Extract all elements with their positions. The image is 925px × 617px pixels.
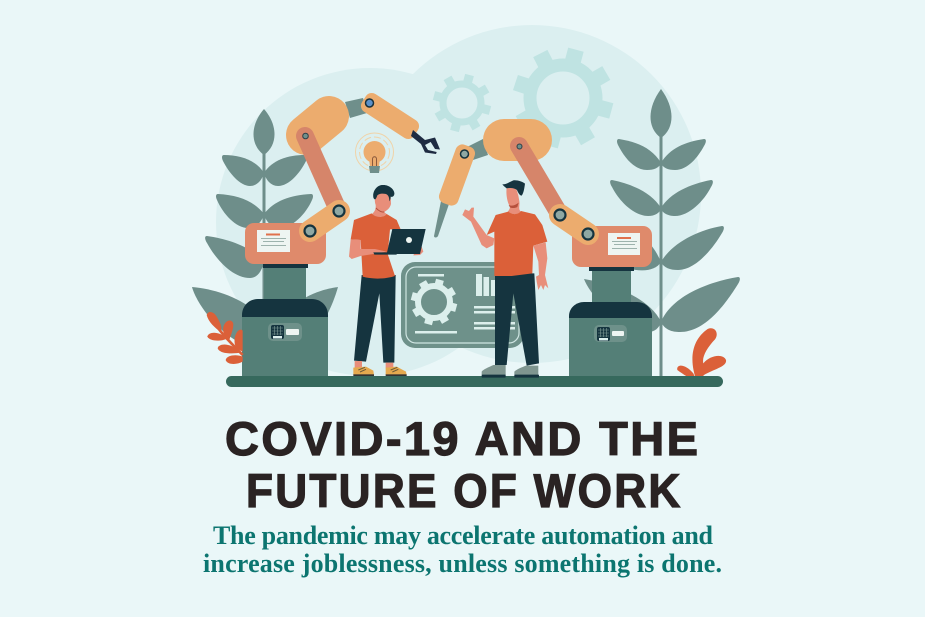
- left robot arm: [303, 90, 440, 210]
- right robot base: [554, 210, 652, 376]
- icon: large gear: [513, 48, 613, 148]
- title: [225, 412, 698, 517]
- robot label: [608, 233, 640, 255]
- robot lower arm: [304, 206, 344, 236]
- lowered arm and hand: [533, 242, 548, 290]
- screen bar chart: [476, 274, 495, 296]
- left man with laptop: [349, 185, 426, 376]
- subtitle: increase joblessness, unless something is done.: [203, 549, 722, 578]
- legs and shoes: [353, 275, 407, 376]
- right red plant: [677, 328, 726, 383]
- icon: small gear: [433, 74, 491, 132]
- screen gear icon: [411, 279, 457, 325]
- left plant: [192, 109, 338, 345]
- right man: [462, 180, 548, 378]
- drill tool: [434, 201, 449, 238]
- ground bar: [226, 376, 723, 387]
- gripper claw: [411, 130, 440, 154]
- keypad panel: [594, 325, 627, 342]
- legs and shoes: [482, 273, 539, 378]
- screen text lines: [474, 306, 515, 330]
- left red plant: [207, 312, 243, 364]
- title: COVID-19 AND THE: [225, 412, 698, 465]
- mouth: [509, 203, 519, 208]
- robot lower arm: [554, 210, 594, 240]
- mouth: [376, 208, 384, 212]
- subtitle: The pandemic may accelerate automation and: [213, 521, 714, 550]
- raised arm and hand: [462, 208, 494, 248]
- right robot arm: [434, 119, 560, 238]
- control screen panel: [401, 262, 524, 348]
- left robot base: [242, 206, 344, 376]
- shirt: [487, 211, 547, 276]
- upper body: [349, 185, 426, 279]
- hair: [373, 185, 394, 201]
- title: FUTURE OF WORK: [246, 465, 680, 517]
- background blob: [216, 25, 701, 376]
- robot label: [257, 230, 290, 252]
- upper body: [462, 180, 548, 290]
- arm: [349, 239, 387, 259]
- subtitle: [203, 521, 722, 578]
- neck and face: [372, 192, 391, 217]
- hand: [413, 247, 423, 255]
- shirt: [351, 213, 401, 279]
- neck and face: [506, 187, 521, 214]
- icon: light bulb: [356, 133, 394, 173]
- right plant: [584, 89, 740, 378]
- keypad panel: [268, 323, 302, 341]
- laptop: [373, 229, 426, 255]
- hair: [502, 180, 525, 196]
